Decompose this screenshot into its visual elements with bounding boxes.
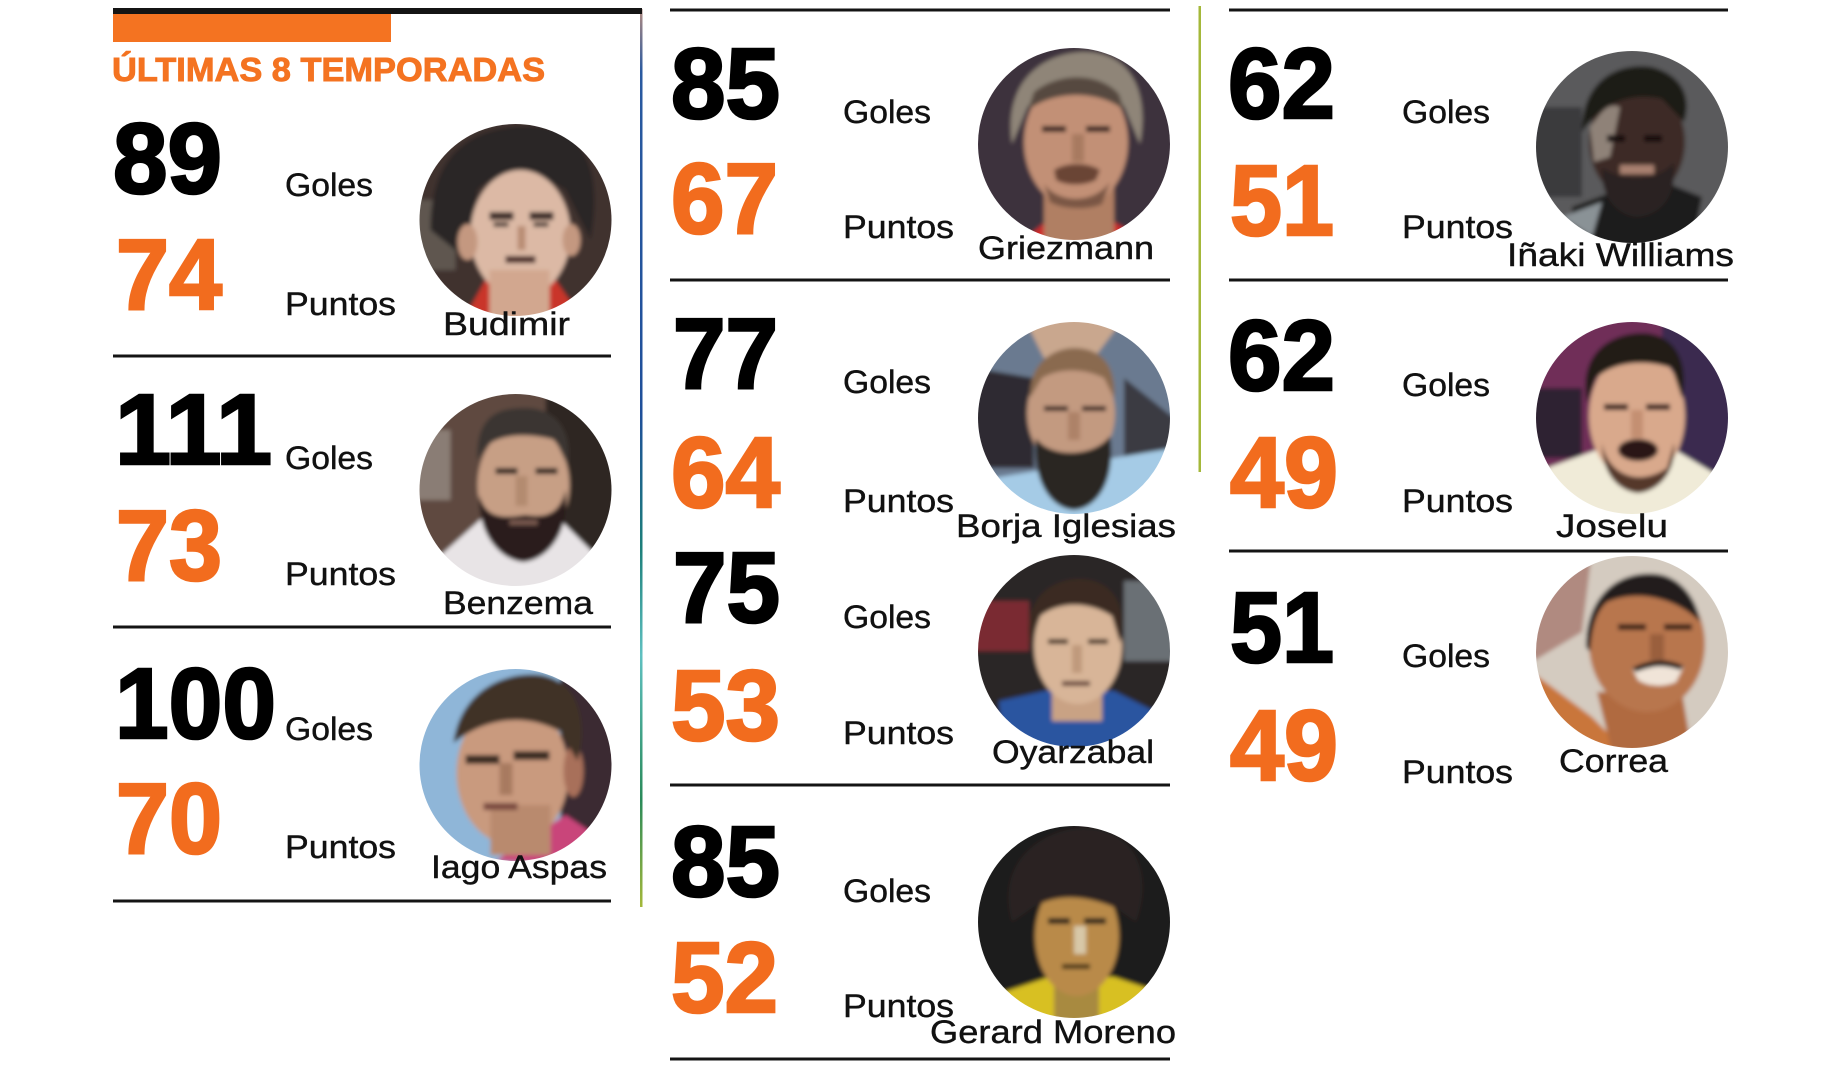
column divider left [640,9,642,907]
label: Goles: Goles [285,440,373,476]
card: Griezmann [671,28,1174,266]
photo: Joselu [1532,318,1732,518]
photo: Iñaki Williams [1532,47,1732,247]
name: Benzema: Benzema [443,585,593,621]
stat: goals 85: 85 [671,806,780,918]
stat: goals 77: 77 [673,298,778,410]
stat: points 49: 49 [1230,417,1338,529]
label: Puntos: Puntos [1402,483,1513,519]
stat: points 73: 73 [116,490,222,602]
card: Iago Aspas [115,648,616,885]
stat: goals 100: 100 [115,648,276,760]
name: Iago Aspas: Iago Aspas [431,849,607,885]
stat: points 51: 51 [1230,145,1334,257]
label: Puntos: Puntos [285,829,396,865]
stat: points 70: 70 [116,763,222,875]
stat: points 64: 64 [671,417,780,529]
stat: points 52: 52 [671,922,778,1034]
photo: Budimir [416,120,616,320]
stat: goals 75: 75 [673,532,780,644]
label: Puntos: Puntos [285,286,396,322]
card: Correa [1230,552,1732,802]
stat: points 67: 67 [671,143,778,255]
name: Joselu: Joselu [1556,508,1668,544]
photo: Oyarzabal [974,551,1174,751]
label: Goles: Goles [843,599,931,635]
label: Goles: Goles [1402,638,1490,674]
label: Goles: Goles [843,364,931,400]
card: Iñaki Williams [1230,46,1733,266]
label: Puntos: Puntos [843,988,954,1024]
label: Goles: Goles [285,711,373,747]
label: Puntos: Puntos [285,556,396,592]
photo: Benzema [416,390,616,590]
stat: points 49: 49 [1230,690,1338,802]
card: Budimir [113,103,616,342]
label: Goles: Goles [843,94,931,130]
photo: Gerard Moreno [974,822,1174,1022]
name: Iñaki Williams: Iñaki Williams [1507,237,1734,273]
card: Borja Iglesias [671,298,1176,544]
name: Griezmann: Griezmann [978,230,1154,266]
stat: goals 51: 51 [1230,572,1334,684]
stat: goals 85: 85 [671,28,780,140]
column divider right [1198,6,1201,472]
card: Benzema [115,374,616,621]
label: Puntos: Puntos [843,483,954,519]
card: Joselu [1230,318,1728,538]
label: Goles: Goles [843,873,931,909]
stat: goals 89: 89 [113,103,222,215]
stat: points 74: 74 [116,219,222,331]
label: Puntos: Puntos [843,209,954,245]
card: Oyarzabal [671,532,1174,770]
photo: Borja Iglesias [974,318,1174,518]
stat: goals 62: 62 [1228,300,1335,412]
label: Puntos: Puntos [1402,754,1513,790]
stat: points 53: 53 [671,650,780,762]
title: ÚLTIMAS 8 TEMPORADAS [112,51,545,88]
name: Budimir: Budimir [443,306,570,342]
stat: goals 111: 111 [115,374,272,486]
label: Puntos: Puntos [843,715,954,751]
stat: goals 62: 62 [1228,28,1335,140]
card: Gerard Moreno [671,806,1176,1050]
name: Borja Iglesias: Borja Iglesias [956,508,1176,544]
photo: Griezmann [974,44,1174,244]
name: Oyarzabal: Oyarzabal [992,734,1154,770]
name: Correa: Correa [1559,743,1668,779]
label: Goles: Goles [1402,367,1490,403]
label: Goles: Goles [285,167,373,203]
label: Goles: Goles [1402,94,1490,130]
header: orange tab and title [112,8,642,88]
photo: Correa [1532,552,1732,752]
name: Gerard Moreno: Gerard Moreno [930,1014,1176,1050]
photo: Iago Aspas [416,665,616,865]
label: Puntos: Puntos [1402,209,1513,245]
